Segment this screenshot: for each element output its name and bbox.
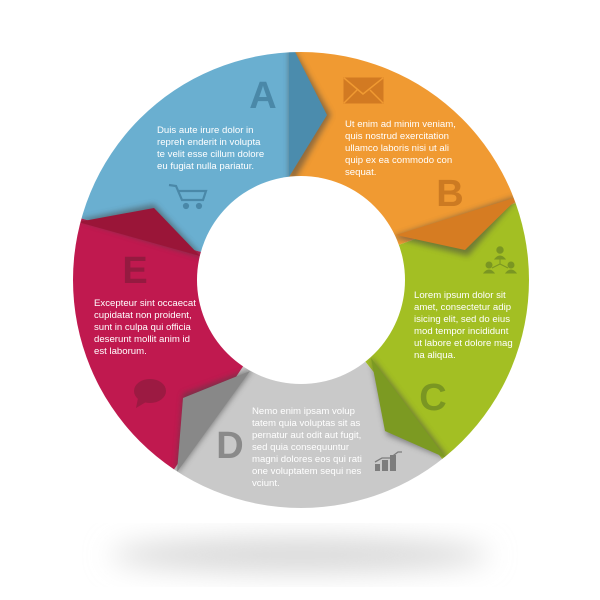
text D: magni dolores eos qui rati [252, 454, 362, 465]
segment E [73, 218, 243, 470]
text B: sequat. [345, 167, 376, 178]
segment B [289, 52, 516, 245]
icon: speech bubble [134, 379, 166, 408]
text B: quip ex ea commodo con [345, 155, 452, 166]
text E: sunt in culpa qui officia [94, 322, 192, 333]
fold D [177, 371, 250, 472]
text E: Excepteur sint occaecat [94, 298, 196, 309]
text E: cupidatat non proident, [94, 310, 192, 321]
icon: cart [169, 185, 206, 208]
letter E: E [122, 250, 148, 292]
letter C: C [419, 377, 447, 419]
icon: envelope [344, 78, 383, 103]
text A: repreh enderit in volupta [157, 137, 261, 148]
segment D [174, 362, 442, 508]
text C: mod tempor incididunt [414, 326, 509, 337]
text C: na aliqua. [414, 350, 456, 361]
fold A [289, 40, 327, 177]
text D: pernatur aut odit aut fugit, [252, 430, 361, 441]
text E: est laborum. [94, 346, 147, 357]
letter B: B [436, 173, 464, 215]
text A: Duis aute irure dolor in [157, 125, 254, 136]
text B: quis nostrud exercitation [345, 131, 449, 142]
text B: ullamco laboris nisi ut ali [345, 143, 449, 154]
fold shadows [78, 40, 520, 475]
text E: deserunt mollit anim id [94, 334, 190, 345]
icon: people network [484, 247, 516, 273]
letter A: A [249, 75, 277, 117]
text C: ut labore et dolore mag [414, 338, 513, 349]
floor shadow [110, 539, 490, 571]
text D: Nemo enim ipsam volup [252, 406, 355, 417]
icon: bar chart [375, 452, 402, 471]
text C: isicing elit, sed do eius [414, 314, 510, 325]
fold C [371, 358, 446, 458]
text D: tatem quia voluptas sit as [252, 418, 360, 429]
segment A [82, 52, 289, 252]
text A: eu fugiat nulla pariatur. [157, 161, 254, 172]
text D: vciunt. [252, 478, 280, 489]
text D: one voluptatem sequi nes [252, 466, 362, 477]
text C: Lorem ipsum dolor sit [414, 290, 506, 301]
fold B [396, 196, 520, 250]
text D: sed quia consequuntur [252, 442, 350, 453]
fold E [78, 208, 200, 256]
text C: amet, consectetur adip [414, 302, 511, 313]
ring [73, 52, 529, 508]
segment C [301, 162, 600, 600]
text A: te velit esse cillum dolore [157, 149, 264, 160]
letter D: D [216, 425, 244, 467]
text B: Ut enim ad minim veniam, [345, 119, 456, 130]
